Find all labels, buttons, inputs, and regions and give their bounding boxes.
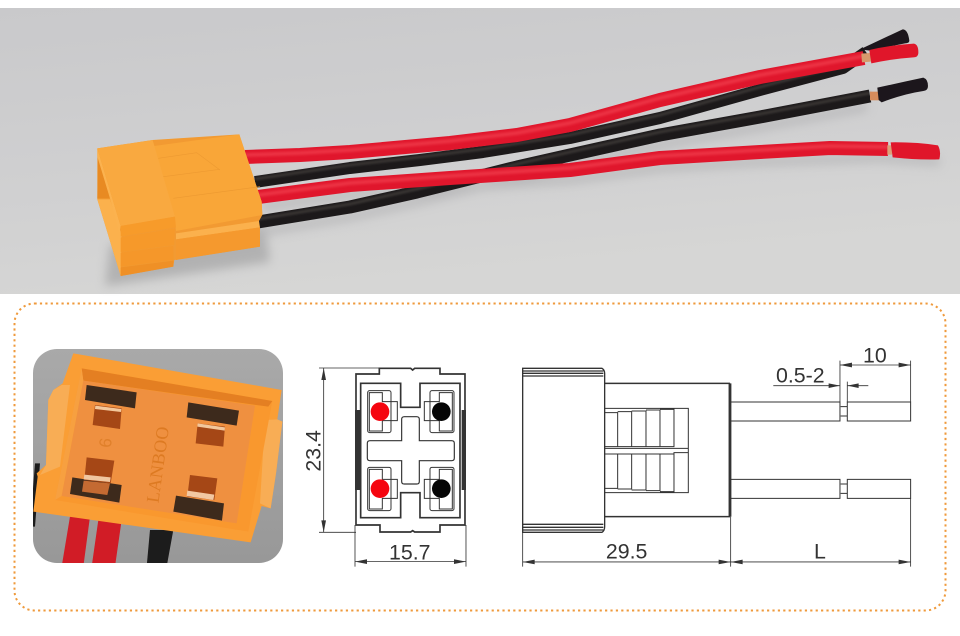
wires [731,402,911,498]
dimension: body length [523,517,731,567]
housing rear section [605,383,731,517]
centre cross [367,417,454,484]
rear block top face [154,134,262,231]
front view outline [356,368,465,532]
inner cavity [361,383,460,518]
dimension: height [302,368,379,532]
dimension: wire length [731,498,911,567]
side ears [40,385,282,508]
polarity dots [371,402,451,498]
contacts [368,391,454,511]
dimension: gap [773,364,868,402]
black wire rear [255,52,866,182]
rear block layers [176,221,260,239]
dimension: body length: 29.5 [606,539,647,563]
red wire lower [258,146,888,197]
dimension: width [355,525,466,567]
panel: product photo [0,8,960,294]
dimension: height: 23.4 [302,430,326,472]
connector and wire shadows [105,107,940,286]
orange connector [97,134,262,276]
front block top face [97,140,175,226]
dimension: strip length [840,344,911,402]
terminal window and ribs [605,408,688,493]
moulded number: 6 [95,437,116,449]
side view drawing [523,344,911,567]
dimension: gap: 0.5-2 [776,364,825,388]
LANBOO moulded mark: LANBOO [142,425,173,504]
connector shell [33,353,282,542]
cavity inner walls [263,420,269,451]
wires behind connector [30,463,173,567]
front block layers [121,217,176,237]
cavity floor [62,381,255,523]
front view drawing [302,368,466,567]
contact slots [70,385,239,521]
black wire front [258,93,870,222]
stripped wire ends [860,29,940,159]
connector body base [97,134,262,276]
panel: connector close-up photo [30,349,283,567]
housing front section [523,368,605,532]
dimension: width: 15.7 [389,540,431,564]
dimension: strip length: 10 [863,344,887,368]
dimension: wire length: L [814,539,826,563]
dotted panel border [14,304,946,610]
side latches [355,410,466,490]
red wire upper [245,56,864,157]
open cavity side [97,199,122,276]
